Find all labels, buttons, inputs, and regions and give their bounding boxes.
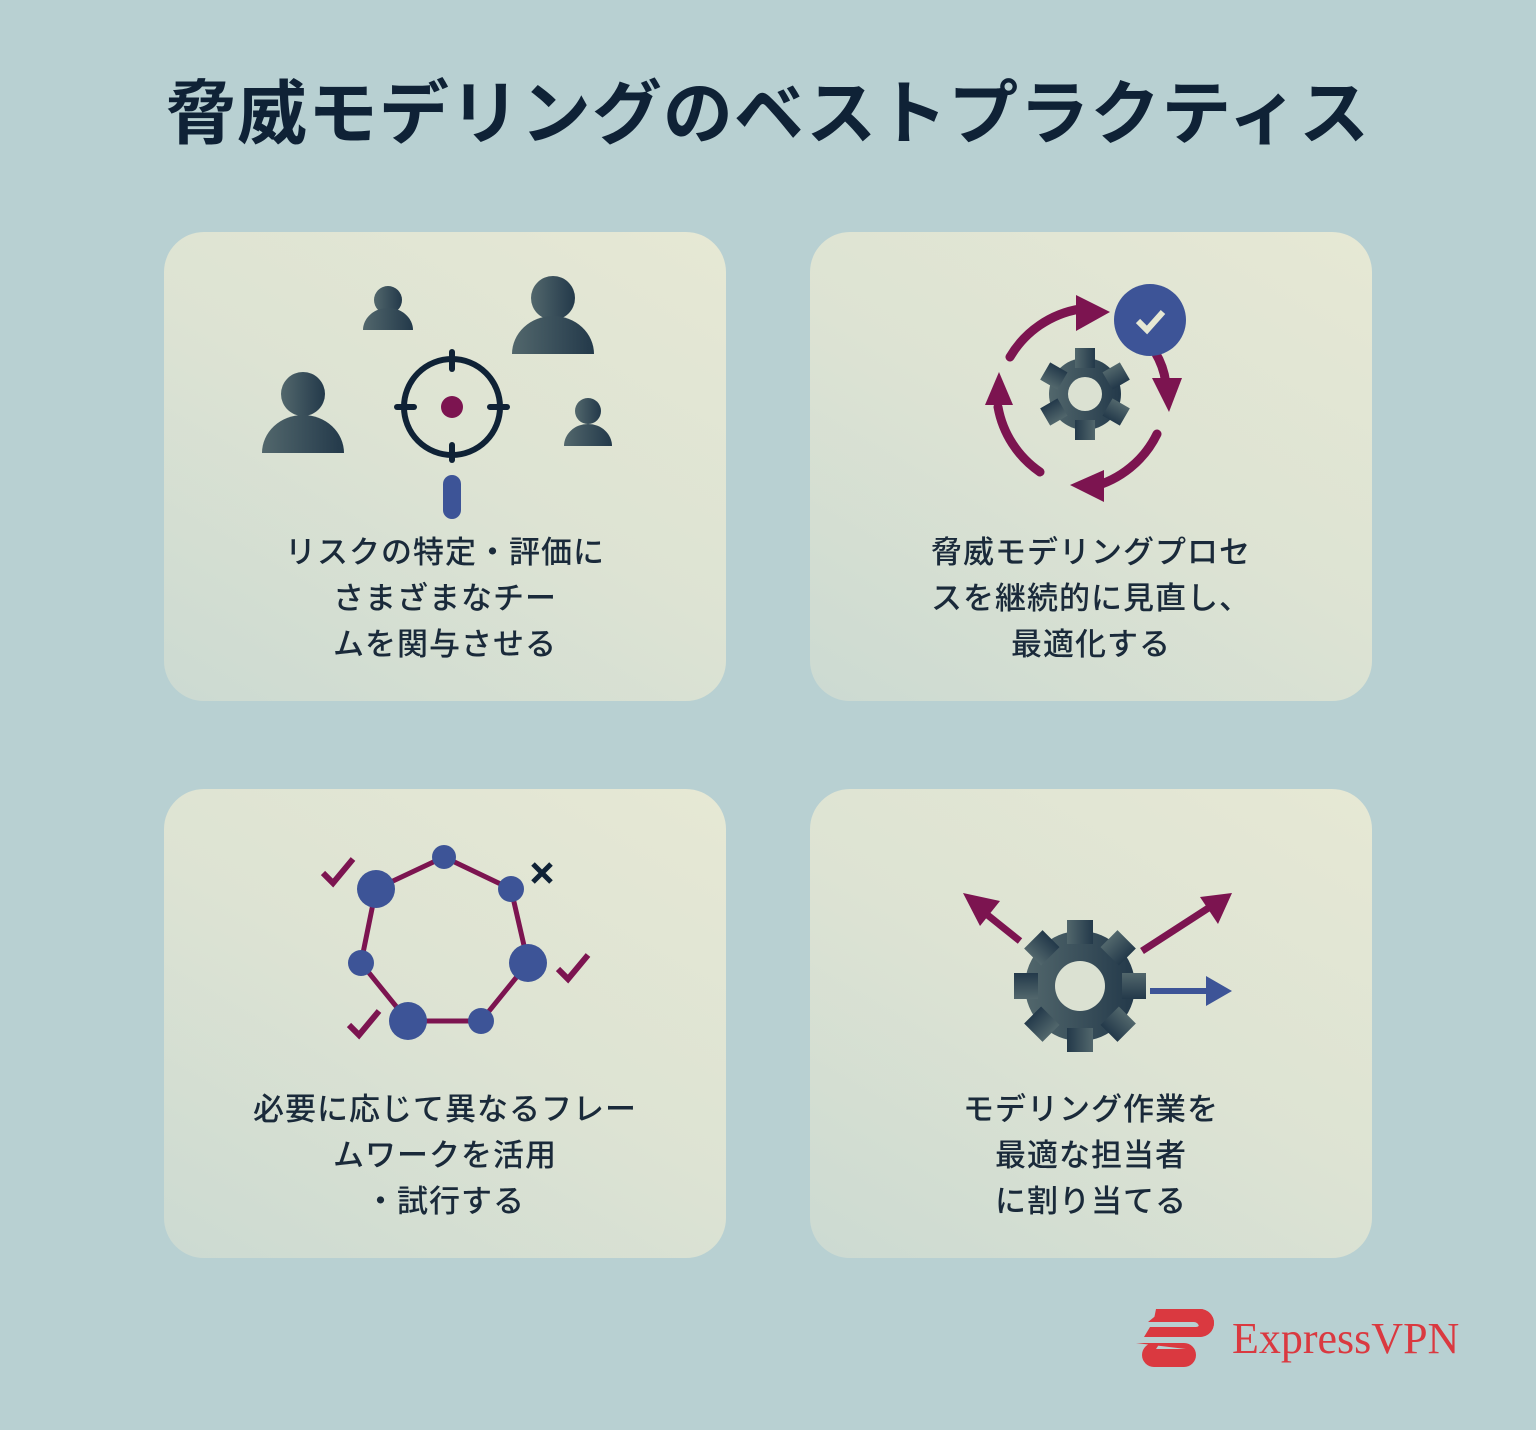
text: card 4 [963,1092,1219,1219]
panel: frameworks [164,789,726,1258]
icon: node graph [320,845,590,1040]
icon: gear with arrows [963,893,1232,1052]
text: card 4: 最適な担当者 [995,1138,1187,1173]
title: 脅威モデリングのベストプラクティス [166,75,1370,153]
text: card 3: 必要に応じて異なるフレー [253,1092,637,1127]
text: card 3: ・試行する [365,1184,525,1219]
text: card 2: 脅威モデリングプロセ [931,535,1251,570]
panel: involve teams [164,232,726,701]
logo: ExpressVPN [1136,1309,1459,1367]
text: card 3: ムワークを活用 [333,1138,557,1173]
panel: assign [810,789,1372,1258]
text: card 1 [285,535,605,662]
text: card 2: スを継続的に見直し、 [931,581,1251,616]
text: card 2: 最適化する [1011,627,1171,662]
text: card 1: リスクの特定・評価に [285,535,605,570]
text: card 1: ムを関与させる [333,627,557,662]
icon: people and target [262,276,612,519]
text: card 2 [931,535,1251,662]
text: card 4: に割り当てる [995,1184,1187,1219]
icon: cycle gear [985,284,1186,502]
text: card 3 [253,1092,637,1219]
logo: ExpressVPN: ExpressVPN [1232,1314,1459,1363]
text: card 4: モデリング作業を [963,1092,1219,1127]
panel: continuous review [810,232,1372,701]
text: card 1: さまざまなチー [333,581,557,616]
